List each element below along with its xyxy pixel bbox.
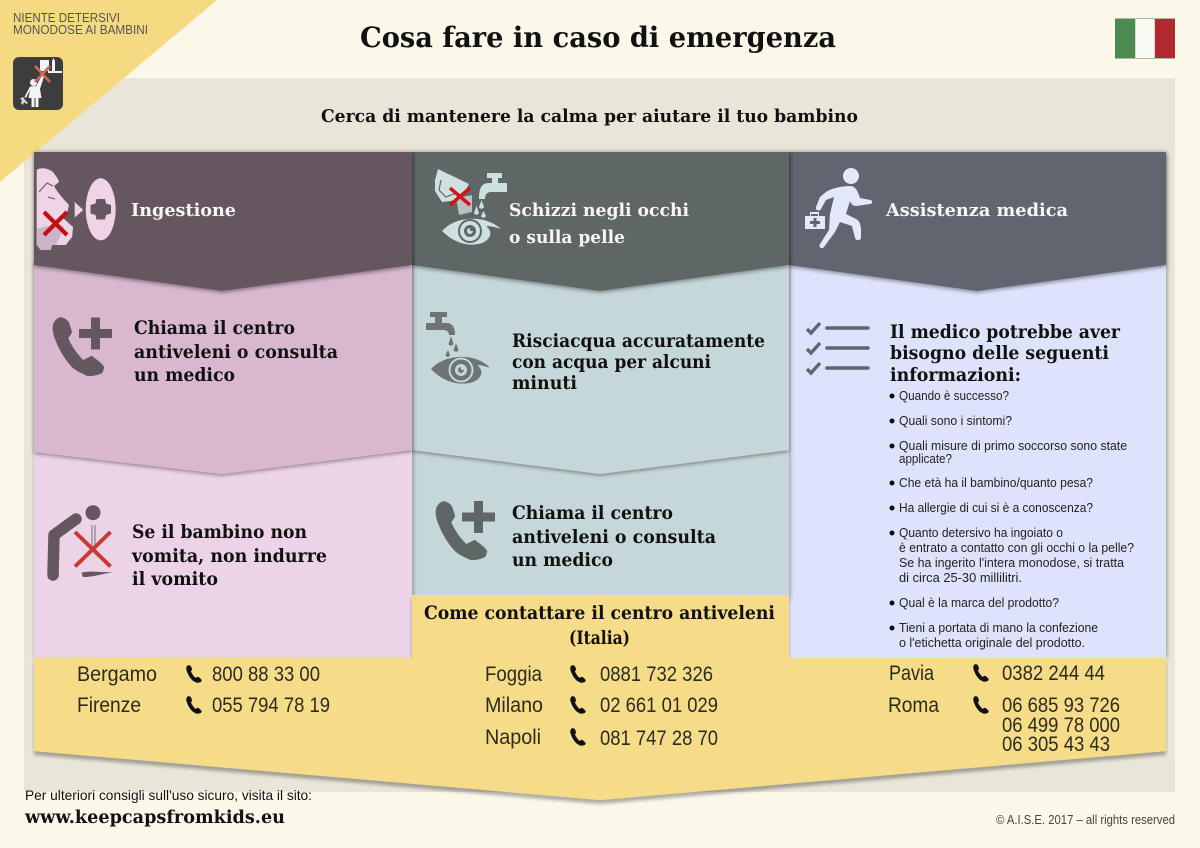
step text: do not induce vomiting: il vomito <box>132 569 218 590</box>
info bullet list <box>890 389 1134 650</box>
contacts heading <box>424 603 775 649</box>
icon: splash and tap <box>435 169 507 245</box>
copyright: © A.I.S.E. 2017 – all rights reserved <box>996 813 1175 827</box>
phone list: left: 800 88 33 00 <box>212 663 320 686</box>
info heading: bisogno delle seguenti <box>890 343 1109 364</box>
icon: phone with plus <box>53 317 112 376</box>
panel: ingestion <box>34 152 412 658</box>
lower pink block <box>34 440 412 658</box>
icon: rinse eye <box>426 312 490 384</box>
phone list: left: 055 794 78 19 <box>212 694 330 717</box>
phone list: right: 06 499 78 000 <box>1002 714 1120 737</box>
step text: rinse: Risciacqua accuratamente <box>512 331 765 352</box>
info heading <box>890 322 1120 386</box>
info bullet list: è entrato a contatto con gli occhi o la pelle? <box>899 541 1134 555</box>
yellow band <box>34 595 1166 800</box>
phone list: centre: Napoli <box>485 726 541 749</box>
header text: Assistenza medica <box>885 200 1068 221</box>
info bullet list: di circa 25-30 millilitri. <box>899 571 1022 585</box>
title: Cosa fare in caso di emergenza <box>360 21 836 54</box>
info bullet list: applicate? <box>899 452 952 466</box>
info bullet list: Qual è la marca del prodotto? <box>899 596 1059 610</box>
step text: rinse <box>512 331 765 394</box>
phone list: right: Pavia <box>889 662 934 685</box>
info bullet list: Se ha ingerito l'intera monodose, si tratta <box>899 556 1124 570</box>
phone list: centre: 081 747 28 70 <box>600 727 718 750</box>
icon: do not induce vomiting <box>53 505 114 577</box>
info bullet list: Ha allergie di cui si è a conoscenza? <box>899 501 1093 515</box>
step text: call poison centre: antiveleni o consulta <box>134 342 338 363</box>
campaign label <box>13 11 148 37</box>
step text: call poison centre: antiveleni o consulta <box>512 527 716 548</box>
column blocks <box>412 152 789 600</box>
info bullet list: Quali misure di primo soccorso sono state <box>899 439 1127 453</box>
campaign label: NIENTE DETERSIVI <box>13 11 120 25</box>
step text: do not induce vomiting <box>131 522 327 590</box>
fold chevron <box>412 260 789 474</box>
panel: medical assistance <box>789 152 1166 658</box>
icon: face with cross <box>37 168 116 250</box>
phone list: right: 06 305 43 43 <box>1002 733 1110 756</box>
step text: call poison centre: un medico <box>134 365 235 386</box>
step text: do not induce vomiting: vomita, non indurre <box>131 546 327 567</box>
phone list: right: Roma <box>888 694 939 717</box>
icon: Italian flag <box>1115 18 1175 59</box>
info bullet list: Quando è successo? <box>899 389 1009 403</box>
contacts heading: (Italia) <box>569 628 630 649</box>
icon: checklist <box>807 323 868 373</box>
panel: poison centre contacts <box>34 595 1166 800</box>
column blocks <box>34 152 412 658</box>
phone list: centre <box>485 663 718 750</box>
icon: phone with plus <box>436 501 495 560</box>
step text: call poison centre <box>134 318 338 386</box>
header block <box>789 152 1166 291</box>
contacts heading: Come contattare il centro antiveleni <box>424 603 775 624</box>
middle pink block <box>34 260 412 474</box>
phone list: right: 0382 244 44 <box>1002 662 1105 685</box>
yellow corner triangle <box>0 0 217 182</box>
phone list: centre: 0881 732 326 <box>600 663 713 686</box>
icon: child reaching shelf <box>13 57 63 110</box>
phone list: centre: 02 661 01 029 <box>600 694 718 717</box>
panel: eyes or skin <box>412 152 789 600</box>
phone list: left: Firenze <box>77 694 141 717</box>
phone list: left <box>77 663 330 717</box>
icon: running person with first-aid kit <box>805 168 872 248</box>
column blocks <box>789 152 1166 658</box>
step text: rinse: minuti <box>512 373 577 394</box>
subtitle: Cerca di mantenere la calma per aiutare il tuo bambino <box>321 106 858 127</box>
header block <box>412 152 789 291</box>
step text: rinse: con acqua per alcuni <box>512 352 711 373</box>
header text: o sulla pelle <box>509 227 625 248</box>
info bullet list: Che età ha il bambino/quanto pesa? <box>899 476 1093 490</box>
step text: call poison centre: un medico <box>512 550 613 571</box>
header text: Ingestione <box>131 200 236 221</box>
footer website: www.keepcapsfromkids.eu <box>24 808 285 828</box>
footer note: Per ulteriori consigli sull'uso sicuro, visita il sito: <box>25 787 312 803</box>
info bullet list: o l'etichetta originale del prodotto. <box>899 636 1085 650</box>
light blue block <box>789 260 1166 658</box>
phone list: centre: Foggia <box>485 663 542 686</box>
phone list: right: 06 685 93 726 <box>1002 694 1120 717</box>
header block <box>34 152 412 291</box>
teal block <box>412 260 789 600</box>
campaign label: MONODOSE AI BAMBINI <box>13 23 148 37</box>
step text: call poison centre <box>512 503 716 571</box>
header text <box>509 200 689 248</box>
info heading: informazioni: <box>890 365 1021 386</box>
step text: call poison centre: Chiama il centro <box>134 318 295 339</box>
header text: Schizzi negli occhi <box>509 200 689 221</box>
info bullet list: Quanto detersivo ha ingoiato o <box>899 526 1063 540</box>
phone list: centre: Milano <box>485 694 543 717</box>
phone list: left: Bergamo <box>77 663 157 686</box>
info heading: Il medico potrebbe aver <box>890 322 1120 343</box>
info bullet list: Tieni a portata di mano la confezione <box>899 621 1098 635</box>
step text: call poison centre: Chiama il centro <box>512 503 673 524</box>
phone list: right <box>888 662 1120 756</box>
step text: do not induce vomiting: Se il bambino non <box>132 522 308 543</box>
info bullet list: Quali sono i sintomi? <box>899 414 1012 428</box>
